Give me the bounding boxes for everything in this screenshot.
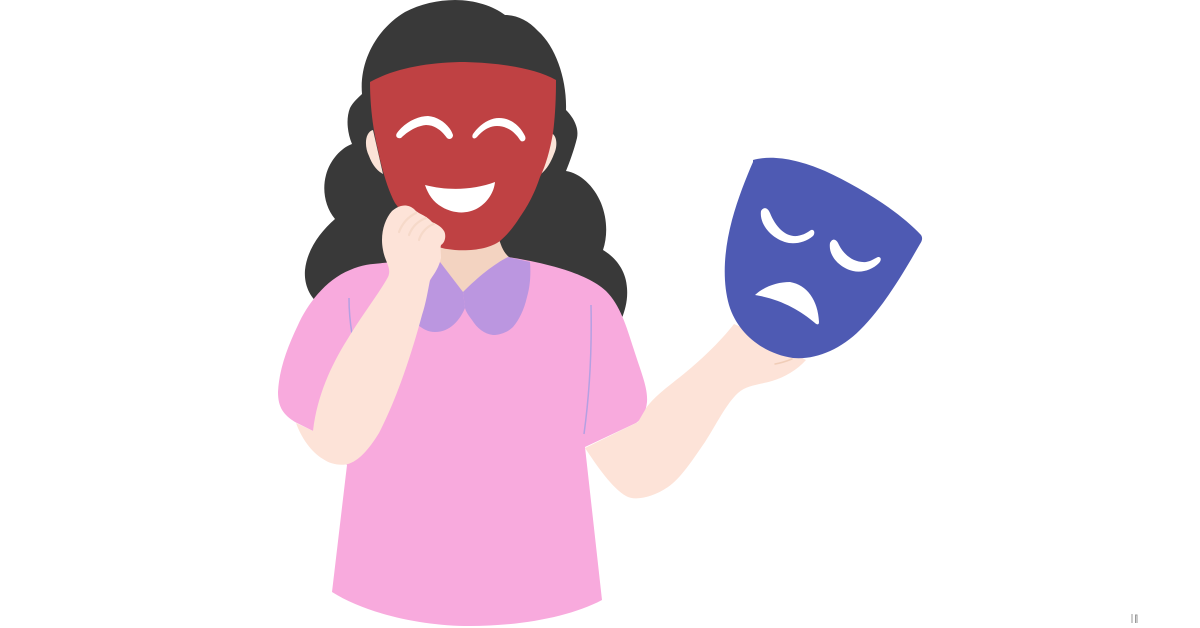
- fingers of the fist: [399, 213, 434, 240]
- left closed eye: [761, 208, 814, 243]
- shirt: [278, 257, 647, 626]
- shirt fold lines: [349, 298, 591, 434]
- ears: [366, 130, 556, 174]
- right closed eye: [830, 240, 881, 272]
- smiling mouth: [425, 182, 495, 212]
- sad blue mask: [725, 158, 922, 358]
- shirt collar: [418, 257, 530, 335]
- left smiling eye: [396, 116, 453, 139]
- right smiling eye: [472, 118, 525, 141]
- hair: [305, 0, 627, 318]
- left arm raised to chin: [296, 205, 445, 465]
- small logo mark: [1132, 614, 1137, 623]
- happy red mask: [370, 62, 556, 250]
- neck: [430, 235, 510, 295]
- right arm holding sad mask: [585, 324, 806, 498]
- palm crease: [775, 359, 792, 364]
- frowning mouth: [755, 282, 819, 324]
